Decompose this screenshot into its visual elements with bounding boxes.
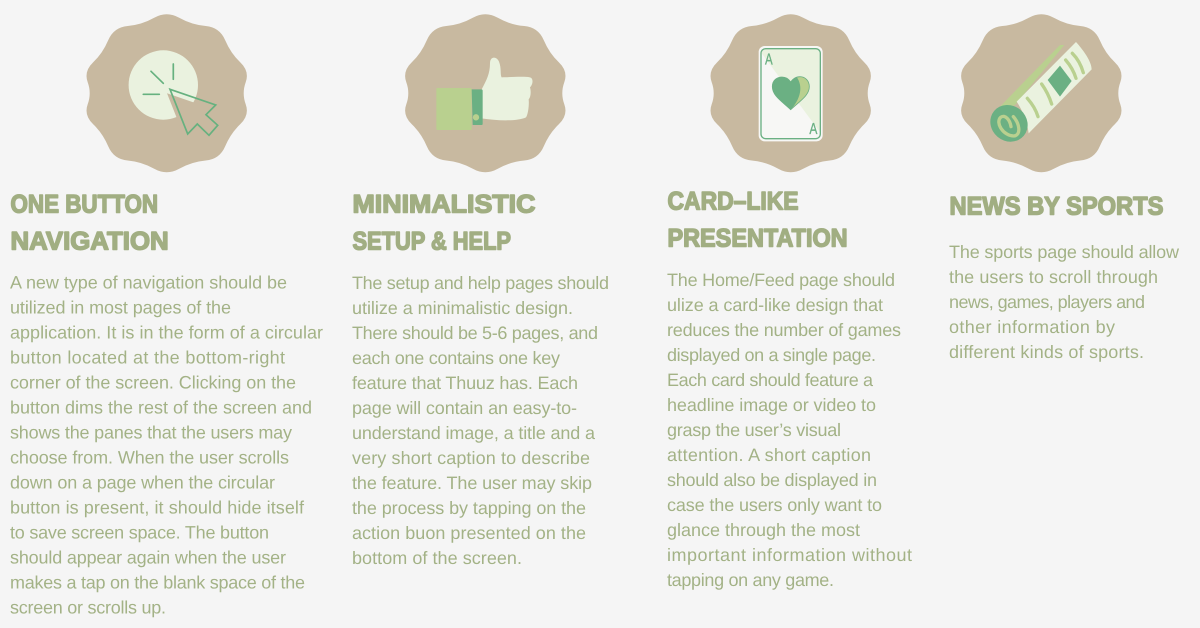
text block: card-like presentation description: tapping on any game. [667, 570, 834, 590]
text block: one button navigation description [10, 272, 323, 618]
text block: minimalistic setup description: utilize a minimalistic design. [352, 298, 573, 318]
text block: card-like presentation description: displayed on a single page. [667, 345, 876, 365]
text block: news by sports description: other information by [949, 317, 1115, 337]
heading: card-like presentation: CARD–LIKE [668, 188, 799, 216]
text block: card-like presentation description [667, 270, 912, 590]
panel: card-like presentation [667, 14, 912, 590]
text block: one button navigation description: button located at the bottom-right [10, 348, 285, 368]
text block: one button navigation description: makes a tap on the blank space of the [10, 572, 305, 592]
text block: card-like presentation description: glance through the most [667, 520, 860, 540]
text block: news by sports description: different kinds of sports. [949, 342, 1144, 362]
text block: one button navigation description: button is present, it should hide itself [10, 498, 305, 518]
heading: one button navigation [10, 190, 169, 256]
heading: minimalistic setup and help: MINIMALISTIC [352, 190, 535, 218]
text block: card-like presentation description: should also be displayed in [667, 470, 877, 490]
text block: one button navigation description: shows the panes that the users may [10, 422, 292, 442]
text block: news by sports description: The sports page should allow [949, 242, 1180, 262]
text block: minimalistic setup description: the process by tapping on the [352, 498, 586, 518]
panel: news by sports [949, 14, 1180, 362]
text block: minimalistic setup description: very short caption to describe [352, 448, 590, 468]
text block: minimalistic setup description: each one contains one key [352, 348, 560, 368]
text block: minimalistic setup description: page will contain an easy-to- [352, 398, 577, 418]
text block: one button navigation description: A new type of navigation should be [10, 272, 287, 292]
heading: card-like presentation: PRESENTATION [668, 224, 848, 252]
icon: ace of hearts playing card: A [809, 121, 818, 138]
text block: card-like presentation description: attention. A short caption [667, 445, 871, 465]
text block: one button navigation description: screen or scrolls up. [10, 598, 166, 618]
icon: cursor clicking a round button [87, 14, 247, 172]
icon: ace of hearts playing card [711, 14, 871, 172]
text block: card-like presentation description: The Home/Feed page should [667, 270, 895, 290]
heading: minimalistic setup and help: SETUP & HELP [352, 228, 511, 256]
text block: one button navigation description: application. It is in the form of a circular [10, 322, 323, 342]
text block: card-like presentation description: grasp the user’s visual [667, 420, 841, 440]
text block: one button navigation description: utilized in most pages of the [10, 298, 231, 318]
text block: card-like presentation description: reduces the number of games [667, 320, 901, 340]
text block: news by sports description [949, 242, 1180, 362]
heading: one button navigation: ONE BUTTON [10, 190, 158, 218]
text block: minimalistic setup description: bottom of the screen. [352, 548, 522, 568]
text block: minimalistic setup description: There should be 5-6 pages, and [352, 323, 598, 343]
text block: minimalistic setup description: action buon presented on the [352, 523, 586, 543]
text block: card-like presentation description: Each card should feature a [667, 370, 874, 390]
text block: card-like presentation description: ulize a card-like design that [667, 295, 883, 315]
text block: card-like presentation description: case the users only want to [667, 495, 882, 515]
text block: card-like presentation description: important information without [667, 545, 912, 565]
text block: one button navigation description: should appear again when the user [10, 548, 286, 568]
text block: minimalistic setup description: feature that Thuuz has. Each [352, 373, 578, 393]
text block: minimalistic setup description: The setup and help pages should [352, 273, 609, 293]
text block: news by sports description: news, games, players and [949, 292, 1145, 312]
panel: one button navigation [10, 14, 323, 618]
heading: minimalistic setup and help [352, 190, 535, 256]
text block: one button navigation description: down on a page when the circular [10, 472, 275, 492]
text block: news by sports description: the users to scroll through [949, 267, 1158, 287]
text block: one button navigation description: button dims the rest of the screen and [10, 398, 312, 418]
heading: card-like presentation [668, 188, 848, 252]
text block: one button navigation description: corner of the screen. Clicking on the [10, 372, 296, 392]
heading: news by sports: NEWS BY SPORTS [950, 192, 1163, 220]
text block: one button navigation description: choose from. When the user scrolls [10, 448, 289, 468]
icon: ace of hearts playing card: A [765, 51, 773, 68]
heading: one button navigation: NAVIGATION [10, 228, 169, 256]
text block: minimalistic setup description: understand image, a title and a [352, 423, 596, 443]
icon: rolled newspaper [961, 14, 1121, 172]
text block: one button navigation description: to save screen space. The button [10, 522, 269, 542]
text block: card-like presentation description: headline image or video to [667, 395, 876, 415]
icon: thumbs up [405, 14, 565, 172]
text block: minimalistic setup description: the feature. The user may skip [352, 473, 592, 493]
text block: minimalistic setup description [352, 273, 609, 568]
panel: minimalistic setup and help [352, 14, 609, 568]
